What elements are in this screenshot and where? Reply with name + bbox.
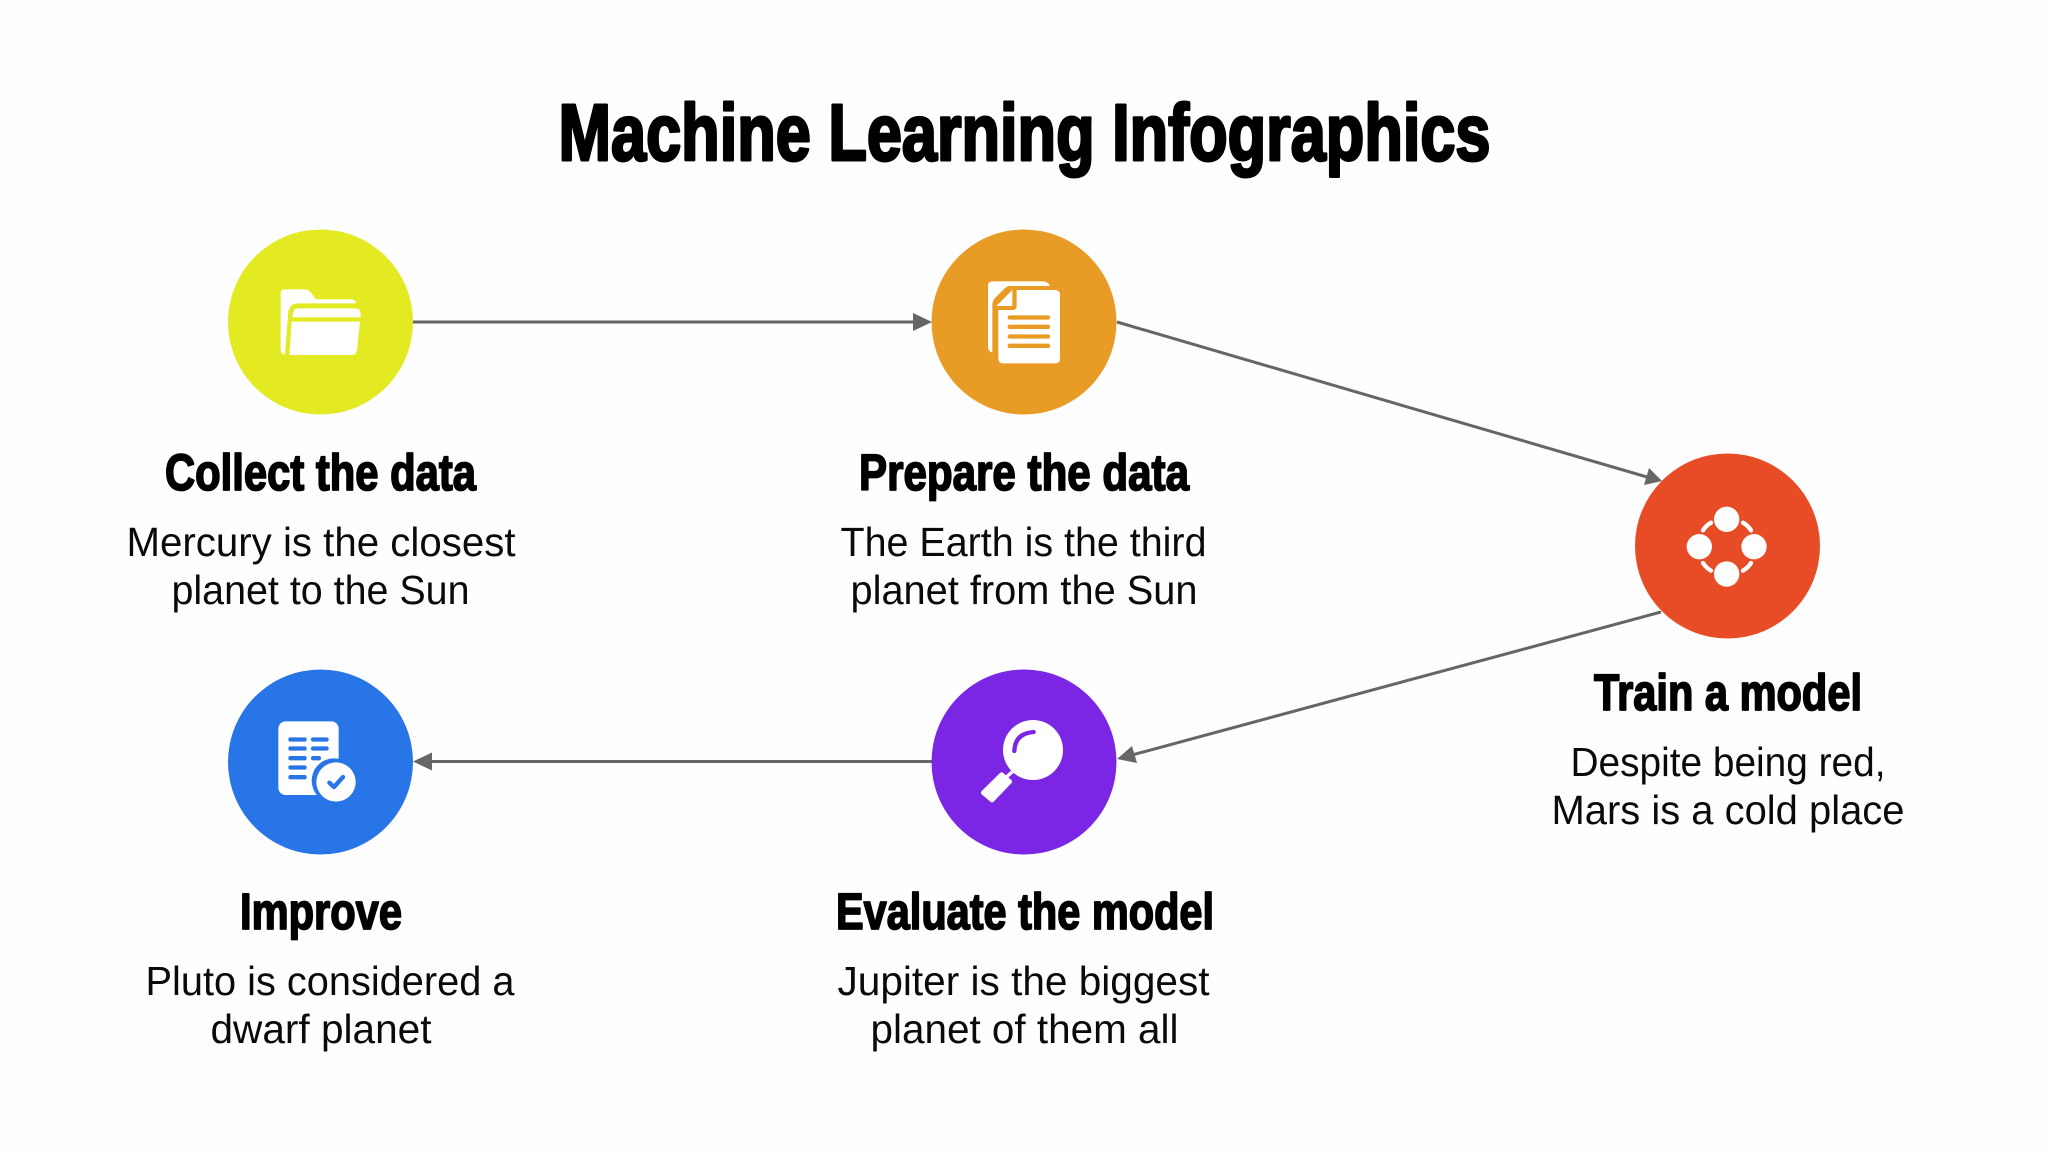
description: Despite being red, [1570, 739, 1886, 785]
arrow: prepare to train [1117, 322, 1662, 485]
description: planet to the Sun [172, 567, 470, 613]
description: The Earth is the third [840, 519, 1206, 565]
icon: folder [281, 289, 361, 355]
description: dwarf planet [210, 1006, 432, 1052]
step: prepare the data [840, 230, 1206, 613]
icon: magnifier [983, 720, 1063, 800]
arrow: collect to prepare [413, 313, 932, 331]
step: improve [146, 670, 515, 1052]
red circle [1635, 454, 1820, 638]
yellow circle [228, 230, 413, 414]
icon: network nodes [1687, 507, 1767, 587]
icon: document [988, 281, 1060, 363]
description: Mars is a cold place [1552, 787, 1904, 833]
step: collect the data [126, 230, 516, 613]
description: planet from the Sun [850, 567, 1198, 613]
orange circle [932, 230, 1116, 414]
heading: Evaluate the model [836, 883, 1214, 940]
arrow: train to evaluate [1117, 612, 1661, 763]
description [840, 519, 1206, 613]
description [146, 958, 515, 1052]
icon: checked document [278, 721, 356, 803]
heading: Train a model [1594, 664, 1862, 721]
arrow: evaluate to improve [413, 752, 932, 770]
description: planet of them all [870, 1006, 1178, 1052]
purple circle [932, 670, 1116, 854]
description [838, 958, 1210, 1052]
heading: Collect the data [165, 444, 477, 501]
description: Mercury is the closest [126, 519, 516, 565]
description [126, 519, 516, 613]
blue circle [228, 670, 413, 854]
step: train a model [1552, 454, 1904, 833]
description: Jupiter is the biggest [838, 958, 1210, 1004]
heading: Prepare the data [859, 444, 1190, 501]
description: Pluto is considered a [146, 958, 515, 1004]
heading: Improve [240, 883, 402, 940]
description [1552, 739, 1904, 833]
step: evaluate the model [836, 670, 1214, 1052]
title: Machine Learning Infographics [558, 88, 1490, 177]
